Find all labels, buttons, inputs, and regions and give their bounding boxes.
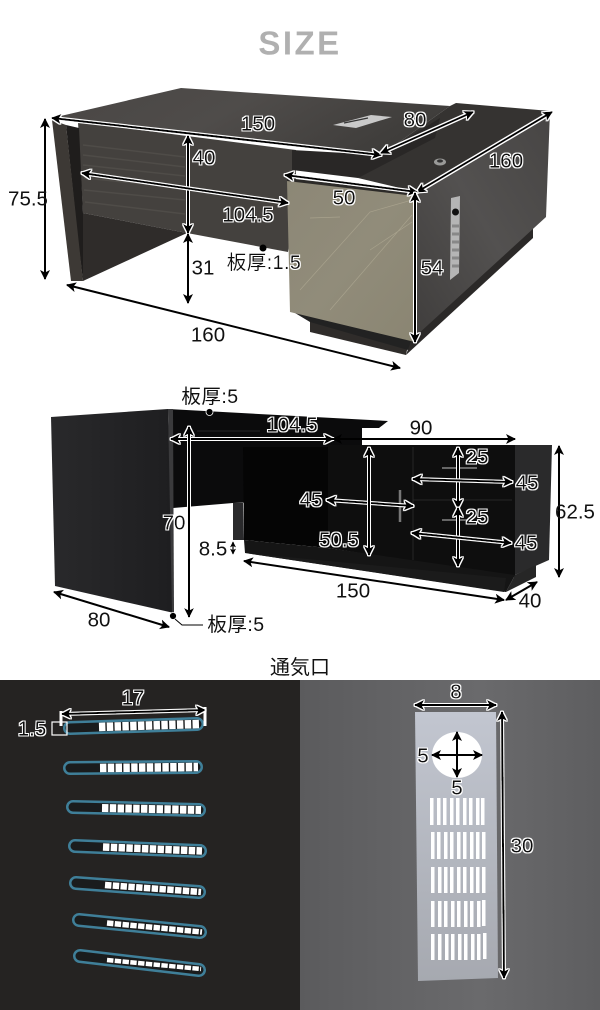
label: 90: 90: [410, 416, 432, 440]
label: 104.5: 104.5: [266, 414, 318, 436]
label: 50.5: 50.5: [319, 528, 359, 552]
arrow: 70: [188, 427, 190, 617]
title: SIZE: [258, 24, 342, 62]
label: 80: 80: [88, 608, 110, 632]
heading: vents: 通気口: [270, 656, 330, 679]
cable hole: [432, 732, 482, 778]
label: 50: 50: [333, 186, 355, 210]
panel: front view of desk: [8, 88, 552, 368]
label: 80: 80: [404, 108, 426, 132]
side vent panel: [450, 196, 460, 280]
arrow: 40: [506, 582, 537, 600]
arrow: 80: [54, 592, 169, 627]
arrow: 104.5: [171, 438, 333, 440]
label: 150: 150: [241, 112, 275, 136]
label: 54: 54: [421, 256, 443, 280]
label: 1.5: 1.5: [18, 718, 46, 740]
label: 8.5: 8.5: [199, 538, 227, 560]
panel: vent slots photo: [0, 680, 300, 1010]
arrow: 31: [187, 234, 189, 303]
label: 17: 17: [122, 686, 144, 710]
arrow: 25 lower: [457, 508, 459, 566]
arrow: 40: [187, 136, 189, 233]
marker: 1.5 square: [52, 722, 67, 735]
label: 31: 31: [192, 256, 214, 280]
arrow: hole height 5: [456, 732, 458, 777]
label: 62.5: 62.5: [555, 500, 595, 524]
panel: vent plate photo: [300, 680, 600, 1010]
arrow: 8: [415, 704, 496, 706]
icon: grommet: [434, 158, 446, 166]
arrow: 104.5: [82, 173, 288, 203]
arrow: height 75.5: [44, 119, 46, 279]
arrow: 150: [244, 561, 504, 600]
arrow: 45 upper: [413, 479, 512, 482]
arrow: 54: [414, 193, 416, 342]
label: 5 left: 5: [417, 744, 429, 768]
arrow: depth 80: [381, 112, 473, 153]
label: 30: 30: [511, 834, 533, 858]
callout: thickness 5 bottom: [170, 612, 265, 636]
photo background: [0, 680, 300, 1010]
arrow: 30: [502, 712, 504, 978]
label: 104.5: 104.5: [222, 204, 274, 226]
label: 160 right: 160: [489, 150, 523, 172]
label: 45 middle: 45: [300, 488, 322, 512]
arrow: 25 upper: [457, 448, 459, 508]
arrow: depth 160 right: [417, 112, 552, 192]
arrow: 45 lower: [412, 533, 511, 543]
arrow: 8.5: [232, 542, 234, 554]
label: 45 upper: 45: [516, 472, 538, 494]
metal plate: [415, 712, 498, 981]
arrow: 17: [61, 708, 205, 725]
label: 5 below: 5: [451, 776, 463, 800]
label: 25 lower: 25: [466, 506, 488, 528]
arrow: hole width 5: [432, 754, 482, 756]
vent slot group: [70, 724, 202, 970]
label: 160 bottom: 160: [191, 324, 225, 346]
label: 75.5: 75.5: [8, 188, 48, 210]
arrow: 62.5: [558, 446, 560, 577]
arrow: width 150: [52, 118, 381, 155]
arrow: 45 middle: [327, 500, 413, 506]
desk illustration: [51, 409, 552, 613]
label: 8: 8: [450, 680, 462, 704]
label: 25 upper: 25: [466, 446, 488, 468]
desk illustration: [52, 88, 550, 355]
callout: thickness 1.5: 板厚:1.5: [227, 252, 301, 274]
plate vent bars: [430, 798, 486, 960]
panel: rear view of desk: [51, 386, 595, 636]
arrow: 50.5: [368, 448, 370, 555]
icon: cable slot: [333, 115, 392, 128]
label: 45 lower: 45: [515, 532, 537, 554]
callout: thickness 5 top: 板厚:5: [181, 386, 239, 408]
label: 70: 70: [163, 512, 185, 534]
photo background: [300, 680, 600, 1010]
arrow: 50: [285, 175, 417, 192]
label: 40: 40: [193, 146, 215, 170]
callout: thickness 5 bottom: 板厚:5: [207, 614, 265, 636]
label: 40: 40: [519, 590, 541, 612]
arrow: length 160 bottom: [67, 285, 400, 368]
label: 150: 150: [336, 580, 370, 602]
arrow: 90: [333, 438, 515, 440]
